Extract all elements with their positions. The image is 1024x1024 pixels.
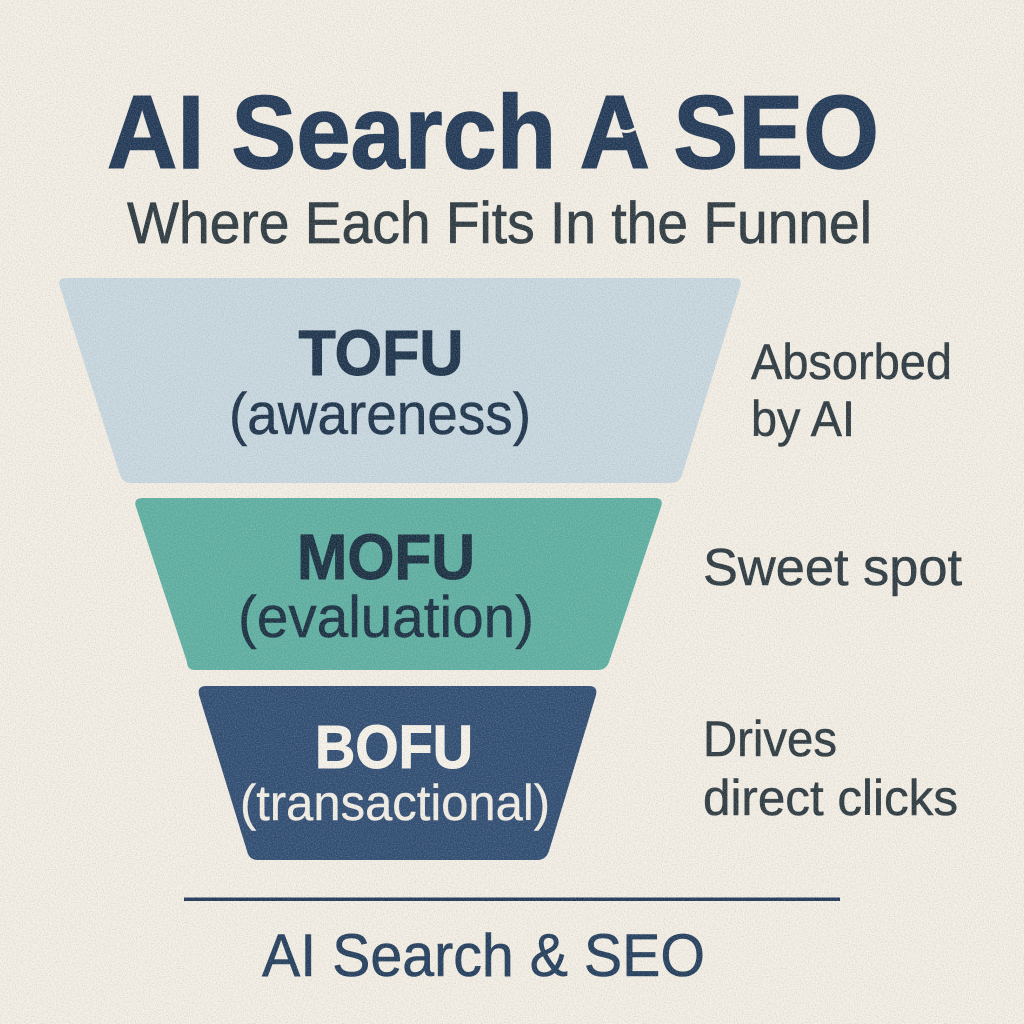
title: AI Search A SEO (107, 75, 879, 191)
label: Absorbed by AI: Absorbed (751, 334, 952, 390)
funnel tier: TOFU: TOFU (298, 317, 464, 389)
funnel tier: MOFU (135, 498, 662, 670)
funnel tier: TOFU (59, 278, 741, 483)
label: Drives direct clicks: Drives (703, 711, 837, 767)
funnel tier: TOFU: (awareness) (229, 382, 531, 447)
footer: AI Search & SEO (262, 922, 705, 989)
funnel tier: BOFU (199, 686, 596, 860)
label: Absorbed by AI (751, 334, 952, 447)
funnel tier: MOFU: MOFU (297, 521, 475, 593)
label: Drives direct clicks: direct clicks (703, 770, 958, 826)
funnel tier: MOFU: (evaluation) (238, 585, 534, 650)
funnel (59, 278, 741, 860)
funnel tier: BOFU: BOFU (315, 713, 473, 781)
subtitle: Where Each Fits In the Funnel (127, 191, 872, 256)
label: Sweet spot: Sweet spot (703, 539, 963, 597)
label: Drives direct clicks (703, 711, 958, 826)
funnel tier: BOFU: (transactional) (240, 775, 550, 831)
label: Absorbed by AI: by AI (751, 391, 855, 447)
